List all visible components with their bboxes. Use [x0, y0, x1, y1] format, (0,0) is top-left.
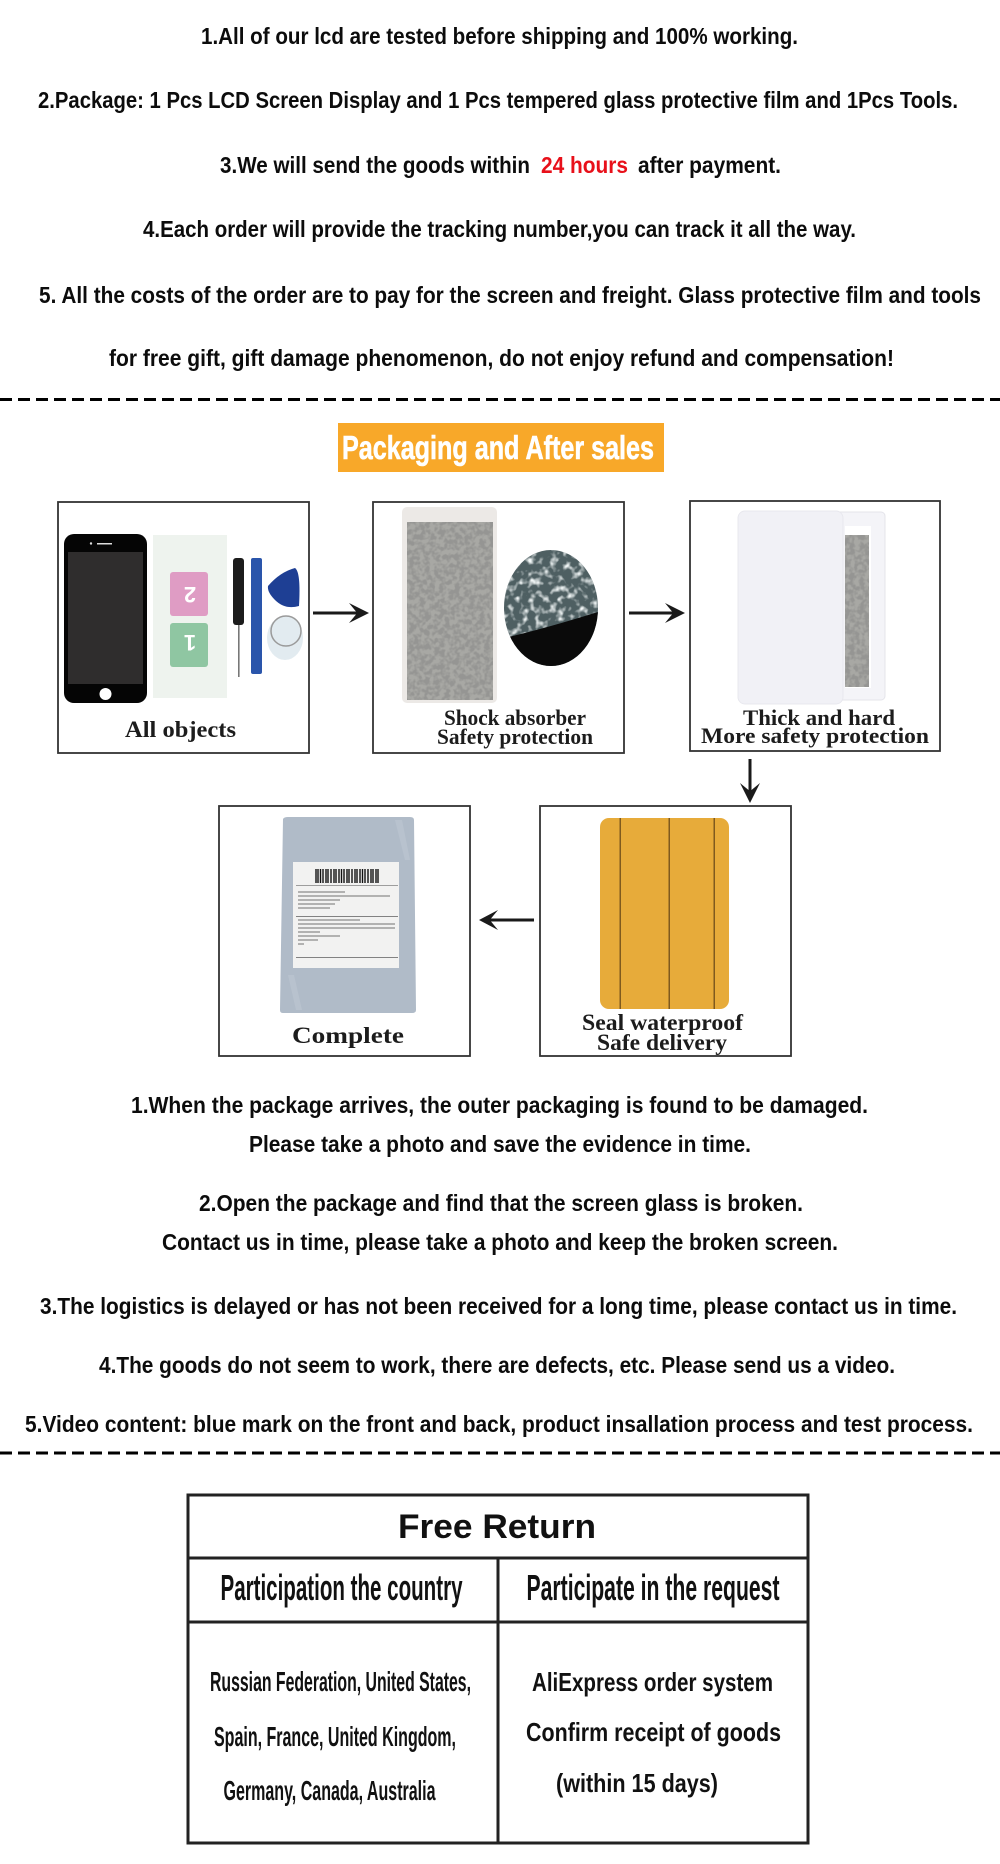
icon: blue triangular pick: [268, 568, 300, 607]
caption: [701, 705, 929, 748]
caption: Complete: [292, 1023, 404, 1048]
caption: Shock absorber: [444, 705, 586, 730]
section heading: Packaging and After sales: [338, 423, 664, 472]
icon: tempered glass film: [153, 535, 227, 698]
request list: [526, 1667, 781, 1798]
arrow: [629, 603, 685, 623]
note 4: 4.Each order will provide the tracking number,you can track it all the way.: [143, 216, 856, 242]
request list: Confirm receipt of goods: [526, 1717, 781, 1747]
bubble wrapped screen: [402, 507, 497, 703]
note 3 with red highlight: after payment.: [638, 152, 781, 178]
caption: [582, 1010, 743, 1055]
caption: [437, 705, 593, 749]
icon: tempered glass film: 2: [184, 582, 196, 607]
arrow: [313, 603, 369, 623]
section heading: Packaging and After sales: Packaging and After sales: [342, 429, 654, 466]
column header: country: Participation the country: [220, 1567, 462, 1608]
table title: Free Return: [398, 1508, 596, 1546]
item 1 line 2: Please take a photo and save the evidence in time.: [249, 1131, 751, 1157]
arrow: [479, 910, 534, 930]
table: free return: [188, 1495, 808, 1843]
after-sales text block: [25, 1092, 973, 1437]
request list: (within 15 days): [556, 1768, 718, 1798]
caption: More safety protection: [701, 723, 929, 748]
note 5 line 2: for free gift, gift damage phenomenon, do not enjoy refund and compensation!: [109, 345, 894, 371]
panel: seal waterproof: [540, 806, 791, 1056]
intro notes text block: [38, 23, 981, 371]
panel: shock absorber: [373, 502, 624, 753]
icon: suction cup: [267, 616, 303, 660]
barcode: [316, 869, 378, 883]
country list: [210, 1666, 471, 1806]
note 3 with red highlight: 3.We will send the goods within: [220, 152, 530, 178]
item 2 line 1: 2.Open the package and find that the screen glass is broken.: [199, 1190, 803, 1216]
note 3 with red highlight: [220, 152, 781, 178]
icon: blue pry tool: [251, 558, 262, 674]
column header: request: Participate in the request: [526, 1567, 780, 1608]
caption: Safe delivery: [597, 1030, 728, 1055]
item 1 line 1: 1.When the package arrives, the outer packaging is found to be damaged.: [131, 1092, 868, 1118]
panel: complete: [219, 806, 470, 1056]
item 4: 4.The goods do not seem to work, there are defects, etc. Please send us a video.: [99, 1352, 895, 1378]
icon: screwdriver: [233, 558, 244, 677]
note 1: 1.All of our lcd are tested before shipping and 100% working.: [201, 23, 798, 49]
note 3 with red highlight: 24 hours: [541, 152, 628, 178]
country list: Russian Federation, United States,: [210, 1666, 471, 1697]
icon: black LCD phone screen: [64, 534, 147, 703]
request list: AliExpress order system: [532, 1667, 773, 1697]
foam box: [738, 511, 885, 704]
icon: yellow sealed bag: [600, 818, 729, 1009]
caption: Thick and hard: [743, 705, 895, 730]
caption: Seal waterproof: [582, 1010, 743, 1035]
arrow: [740, 759, 760, 803]
icon: grey parcel with shipping label: [280, 817, 416, 1013]
icon: tempered glass film: 1: [184, 630, 196, 655]
panel: all objects: [58, 502, 309, 753]
country list: Spain, France, United Kingdom,: [214, 1721, 456, 1752]
caption: Safety protection: [437, 724, 593, 749]
item 2 line 2: Contact us in time, please take a photo and keep the broken screen.: [162, 1229, 838, 1255]
caption: All objects: [125, 717, 236, 742]
bubble wrap close-up: [504, 550, 598, 667]
country list: Germany, Canada, Australia: [224, 1775, 436, 1806]
panel: thick and hard foam box: [690, 501, 940, 751]
